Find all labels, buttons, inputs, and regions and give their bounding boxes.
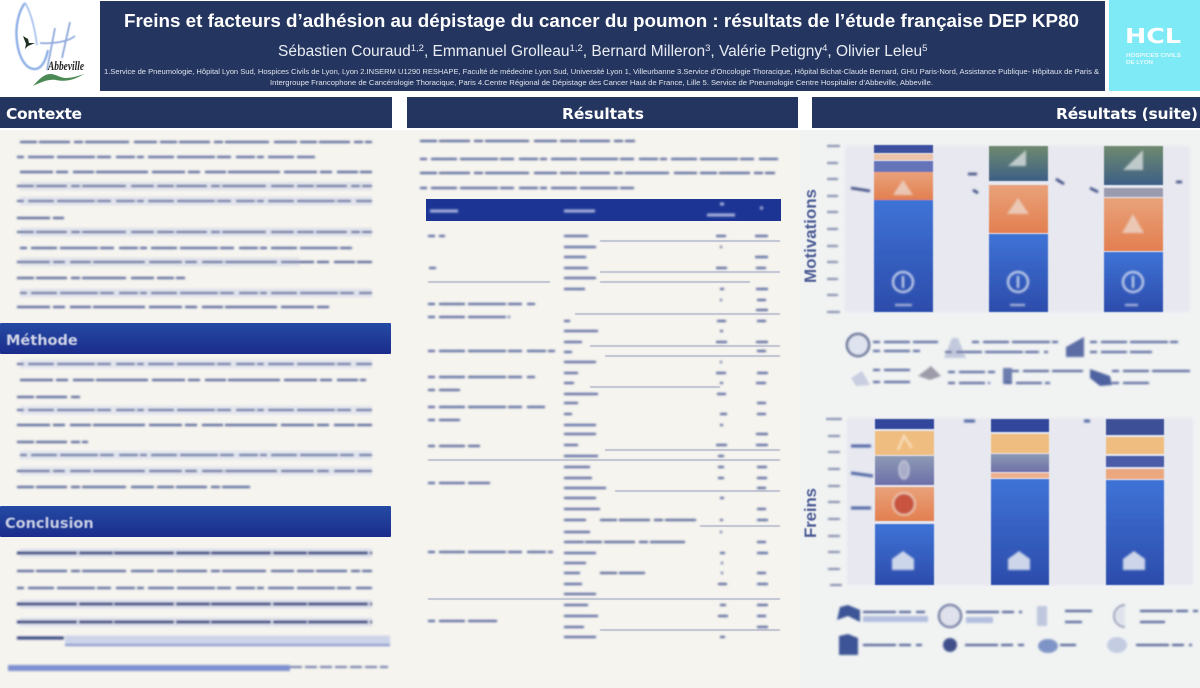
value column %: [755, 236, 768, 627]
bar 2: [991, 419, 1049, 585]
authors: 3: [705, 43, 710, 54]
logo: HCL: HCL: [1125, 24, 1181, 48]
heading: Conclusion: [0, 506, 391, 537]
row labels: [428, 236, 555, 621]
chart: freins stacked bars: [801, 418, 1193, 596]
affiliations: Intergroupe Francophone de Cancérologie Thoracique, Paris 4.Centre Régional de Dépistage des Cancer Haut de France, Lille 5. Service de Pneumologie Centre Hospitalier d’Abbeville, Abbeville.: [270, 78, 933, 87]
heading: Résultats: [407, 97, 798, 128]
plot background: [845, 146, 1190, 312]
y axis ticks: [826, 419, 842, 585]
heading: Méthode: [0, 323, 391, 354]
bar 3: [1106, 419, 1164, 585]
chart: motivations stacked bars: [801, 145, 1190, 323]
title: Freins et facteurs d’adhésion au dépistage du cancer du poumon : résultats de l’étude française DEP KP80: [124, 10, 1079, 31]
icon: motivation 2: [944, 338, 966, 358]
modality column: [564, 236, 606, 637]
y axis ticks: [827, 146, 840, 312]
text block: conclusion body: [8, 553, 390, 668]
icon: frein 2: [939, 605, 961, 627]
outside value labels: [851, 174, 1182, 193]
affiliations: 1.Service de Pneumologie, Hôpital Lyon Sud, Hospices Civils de Lyon, Lyon 2.INSERM U1290 RESHAPE, Faculté de médecine Lyon Sud, Université Lyon 1, Villeurbanne 3.Service d’Oncologie Thoracique, Hôpital Bichat-Claude Bernard, GHU Paris-Nord, Assistance Publique- Hôpitaux de Paris &: [104, 67, 1099, 76]
icon: motivation 4: [851, 371, 870, 386]
icon: information circle: [847, 334, 869, 356]
chart caption: freins: [925, 664, 1132, 670]
logo: HCL: [1109, 0, 1200, 91]
bar 1: [874, 145, 933, 312]
text block: contexte body: [17, 142, 372, 307]
logo: HCL: DE LYON: [1126, 60, 1153, 66]
table: population characteristics: [426, 199, 781, 637]
heading: Conclusion: Conclusion: [5, 516, 94, 532]
long modality labels: [585, 520, 696, 573]
y axis title: Motivations: [801, 189, 820, 283]
heading: Contexte: [0, 97, 392, 128]
table caption: [512, 650, 700, 652]
chart caption: motivations: [893, 400, 1125, 402]
heading: Résultats (suite): Résultats (suite): [1056, 105, 1198, 123]
legend: motivations: [847, 334, 1190, 386]
legend: freins: [837, 605, 1198, 655]
outside value labels: [851, 421, 1090, 508]
authors: 5: [922, 43, 927, 54]
icon: motivation 3: [1066, 337, 1084, 357]
legend text: [863, 619, 993, 620]
heading: Méthode: Méthode: [6, 333, 78, 349]
authors: 4: [822, 43, 827, 54]
authors: 1,2: [570, 43, 583, 54]
authors: 1,2: [411, 43, 424, 54]
x axis labels: [892, 322, 1140, 324]
icon: frein 6: [943, 638, 957, 652]
table header: [426, 199, 781, 221]
heading: Contexte: Contexte: [6, 105, 82, 123]
bar icons: [893, 150, 1144, 305]
authors: , Bernard Milleron: [583, 43, 705, 60]
affiliations: [104, 67, 1099, 87]
bar 2: [989, 146, 1048, 312]
logo: Abbeville hospital: [16, 3, 84, 86]
authors: , Valérie Petigny: [710, 43, 822, 60]
x axis labels: [893, 595, 1146, 597]
logo: HCL: HOSPICES CIVILS: [1126, 53, 1181, 59]
legend text: [873, 342, 1190, 383]
value column n: [716, 236, 728, 637]
icon: frein 4: [1114, 605, 1125, 627]
icon: frein 8: [1107, 637, 1127, 653]
authors: , Olivier Leleu: [827, 43, 922, 60]
icon: frein 1: [837, 605, 860, 622]
text block: méthode body: [17, 364, 372, 487]
heading: Résultats: Résultats: [562, 105, 644, 123]
icon: motivation 5: [918, 366, 941, 380]
plot background: [847, 418, 1193, 585]
icon: frein 5: [839, 634, 858, 655]
icon: frein 7: [1038, 639, 1058, 653]
icon: motivation 7: [1090, 369, 1112, 386]
icon: frein 3: [1037, 606, 1047, 626]
bar icons: [892, 436, 1145, 570]
footnote: [962, 682, 1195, 684]
row rules: [428, 241, 780, 630]
heading: Résultats (suite): [812, 97, 1200, 128]
icon: motivation 6: [1003, 368, 1012, 384]
bar 1: [875, 419, 934, 585]
header banner: [100, 1, 1105, 91]
authors: Sébastien Couraud: [278, 43, 411, 60]
bar 3: [1104, 146, 1163, 312]
logo: Abbeville hospital: Abbeville: [47, 59, 84, 73]
authors: , Emmanuel Grolleau: [424, 43, 570, 60]
y axis title: Freins: [801, 488, 820, 538]
text block: résultats intro: [420, 141, 780, 188]
